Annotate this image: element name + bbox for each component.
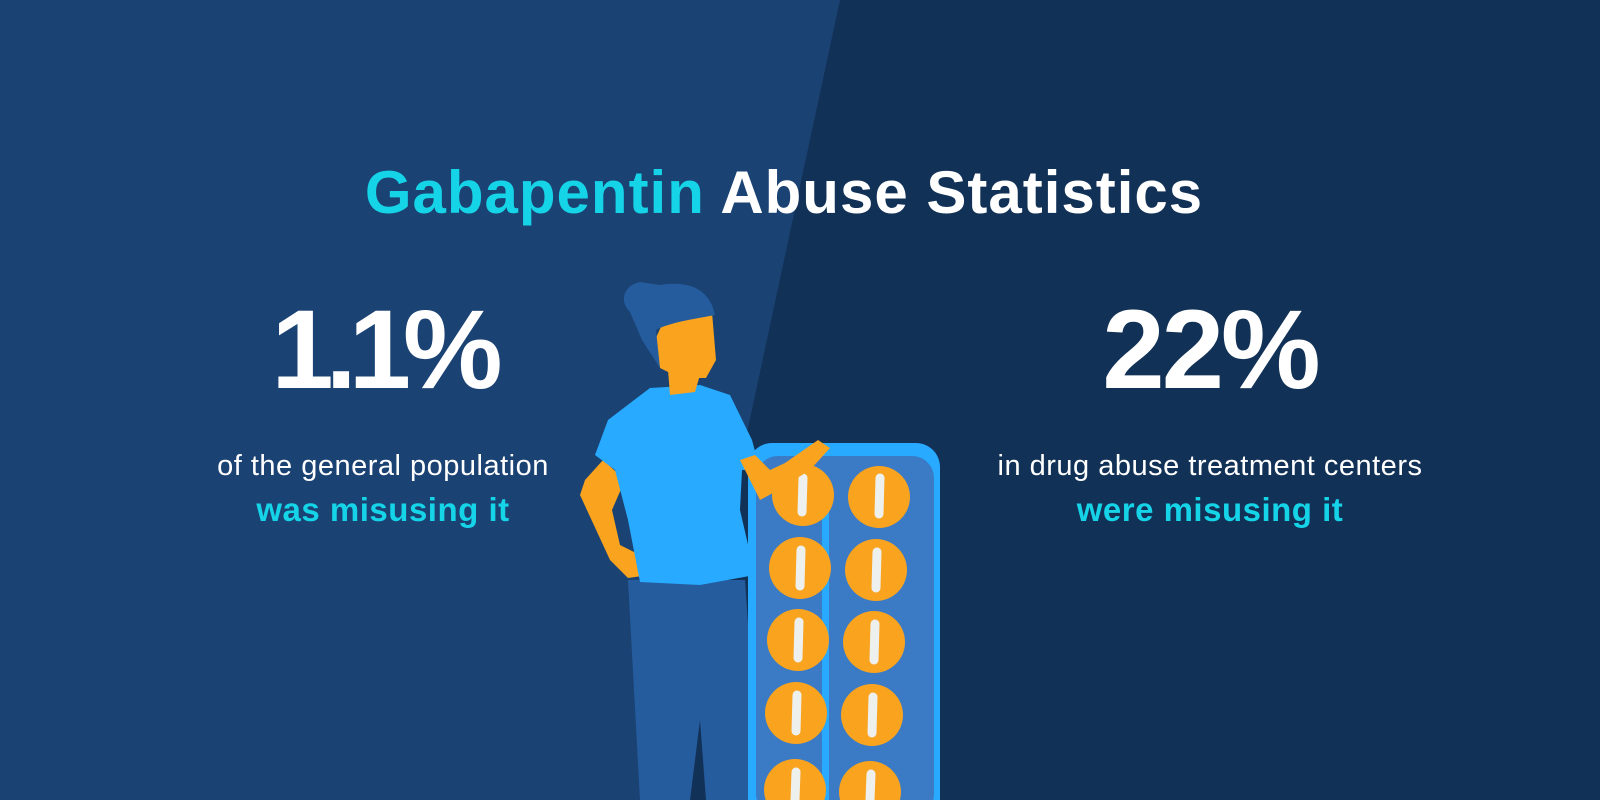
stat: 22% — [998, 287, 1422, 528]
caption: in drug abuse treatment centers — [998, 450, 1422, 482]
stat: 1.1% — [217, 287, 549, 528]
number: 1.1% — [271, 287, 495, 412]
pill pack — [748, 443, 940, 800]
caption — [217, 450, 549, 528]
left arm — [580, 460, 650, 578]
caption: was misusing it — [256, 491, 510, 528]
title: Gabapentin Abuse Statistics — [365, 159, 1203, 226]
shirt — [595, 385, 760, 585]
neck and face — [668, 370, 700, 395]
caption: were misusing it — [1077, 491, 1343, 528]
right arm — [740, 440, 830, 500]
hair — [624, 282, 715, 368]
pants — [628, 580, 760, 800]
caption — [998, 450, 1422, 528]
number: 22% — [1102, 287, 1318, 412]
caption: of the general population — [217, 450, 549, 482]
